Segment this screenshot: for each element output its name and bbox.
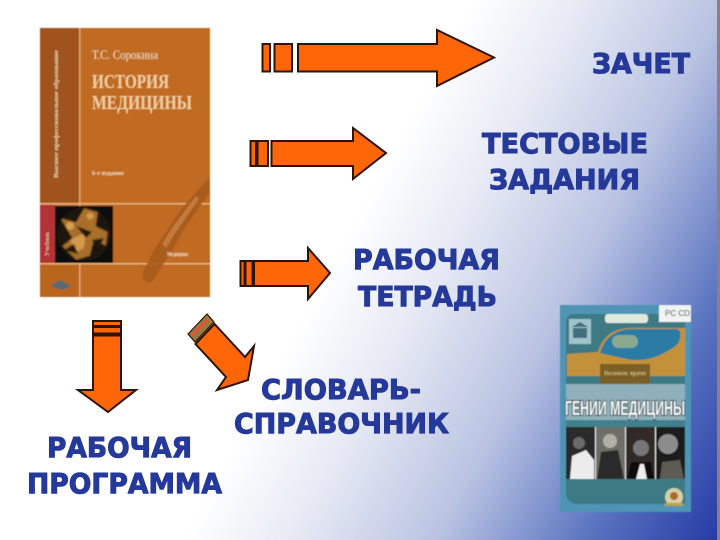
pale band <box>566 384 685 420</box>
edition: 6-е издание <box>92 170 124 177</box>
orange portrait banner <box>567 328 685 384</box>
author: Т.С. Сорокина <box>92 47 158 62</box>
label: ТЕСТОВЫЕ ЗАДАНИЯ: ЗАДАНИЯ <box>489 163 640 196</box>
label: СЛОВАРЬ-СПРАВОЧНИК: СПРАВОЧНИК <box>234 407 449 440</box>
publisher name: Медицина <box>167 252 188 258</box>
arrow to РАБОЧАЯ ТЕТРАДЬ <box>240 248 330 299</box>
red label: Учебник <box>44 232 51 256</box>
CD cover: Гении медицины <box>560 305 691 512</box>
book spine <box>40 28 80 297</box>
book title: ИСТОРИЯ <box>92 72 169 93</box>
arrow down to РАБОЧАЯ ПРОГРАММА <box>78 321 136 412</box>
label: РАБОЧАЯ ТЕТРАДЬ <box>353 243 500 313</box>
book cover: История медицины <box>40 28 210 297</box>
label: ЗАЧЕТ: ЗАЧЕТ <box>592 47 690 80</box>
label: РАБОЧАЯ ПРОГРАММА: ПРОГРАММА <box>27 467 222 500</box>
label: ТЕСТОВЫЕ ЗАДАНИЯ: ТЕСТОВЫЕ <box>482 127 648 160</box>
book spine: Высшее профессиональное образование <box>53 50 60 178</box>
label: РАБОЧАЯ ТЕТРАДЬ: РАБОЧАЯ <box>353 243 500 276</box>
book title <box>92 72 192 114</box>
arrow to ЗАЧЕТ <box>262 30 494 86</box>
label: РАБОЧАЯ ПРОГРАММА: РАБОЧАЯ <box>47 431 192 464</box>
label: ТЕСТОВЫЕ ЗАДАНИЯ <box>482 127 648 196</box>
label: РАБОЧАЯ ТЕТРАДЬ: ТЕТРАДЬ <box>358 280 497 313</box>
antique vase image <box>55 206 113 263</box>
top pill label <box>605 314 648 323</box>
thermometer shadow ornament <box>143 178 210 282</box>
PC CD badge: PC CD <box>665 309 690 318</box>
arrow to ТЕСТОВЫЕ ЗАДАНИЯ <box>250 128 386 179</box>
book title: МЕДИЦИНЫ <box>92 93 192 114</box>
logo emblem <box>569 319 591 344</box>
label: СЛОВАРЬ-СПРАВОЧНИК <box>234 373 449 440</box>
label: СЛОВАРЬ-СПРАВОЧНИК: СЛОВАРЬ- <box>261 373 421 406</box>
portrait photos <box>566 427 685 479</box>
red label <box>40 205 55 263</box>
mascot badge <box>665 488 683 506</box>
publisher logo <box>50 280 72 290</box>
label: РАБОЧАЯ ПРОГРАММА <box>27 431 222 500</box>
orange portrait banner: Великие врачи <box>604 371 647 377</box>
PC CD badge <box>659 305 691 322</box>
diagonal arrow to СЛОВАРЬ-СПРАВОЧНИК <box>188 314 254 390</box>
book horizontal lines <box>40 203 210 264</box>
